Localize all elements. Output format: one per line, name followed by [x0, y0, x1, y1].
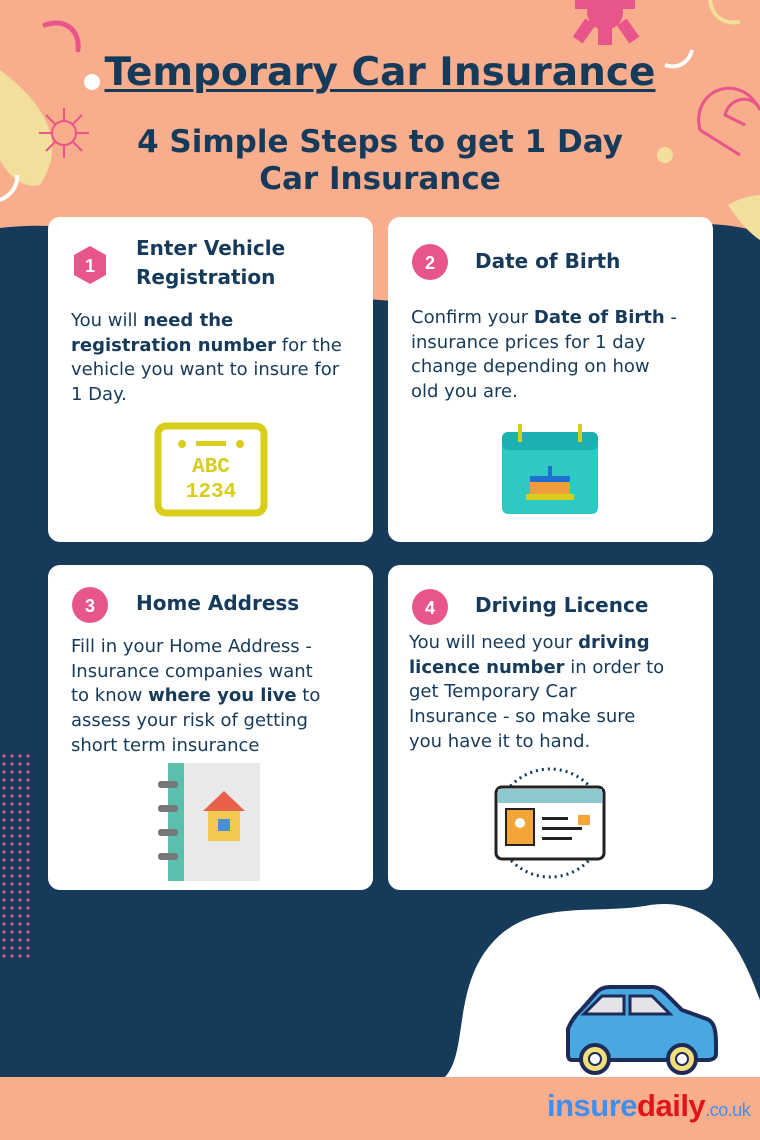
- panel: step 4: [388, 565, 713, 890]
- icon: plate: 1234: [186, 481, 236, 504]
- icon: plate: ABC: [192, 456, 230, 479]
- heading: Home Address: [136, 591, 299, 615]
- icon: licence card: [494, 768, 606, 878]
- icon: car: [566, 985, 718, 1075]
- dotted pattern: [2, 754, 30, 958]
- text: old you are.: [411, 381, 518, 402]
- logo: insuredaily.co.uk: [547, 1088, 750, 1123]
- text: You will need the: [71, 310, 233, 331]
- text: [409, 632, 664, 752]
- text: You will need your driving: [409, 632, 650, 653]
- heading: Driving Licence: [475, 593, 648, 617]
- icon: address book: [158, 763, 260, 881]
- text: licence number in order to: [409, 657, 664, 678]
- icon: calendar cake: [502, 424, 598, 514]
- subtitle: [137, 124, 623, 197]
- title: Temporary Car Insurance: [105, 50, 655, 95]
- panel: step 1: [48, 217, 373, 542]
- text: 1 Day.: [71, 384, 127, 405]
- badge 1: 1: [85, 256, 95, 276]
- text: change depending on how: [411, 356, 650, 377]
- text: get Temporary Car: [409, 681, 576, 702]
- panel: step 2: [388, 217, 713, 542]
- text: Insurance companies want: [71, 661, 313, 682]
- text: Insurance - so make sure: [409, 706, 635, 727]
- text: [411, 307, 677, 402]
- text: vehicle you want to insure for: [71, 359, 339, 380]
- text: [71, 636, 320, 756]
- text: registration number for the: [71, 335, 342, 356]
- text: Fill in your Home Address -: [71, 636, 312, 657]
- heading: Enter Vehicle: [136, 236, 285, 260]
- text: [71, 310, 342, 405]
- badge 2: 2: [425, 253, 435, 273]
- text: short term insurance: [71, 735, 259, 756]
- heading: Registration: [136, 265, 275, 289]
- panel: step 3: [48, 565, 373, 890]
- text: Confirm your Date of Birth -: [411, 307, 677, 328]
- badge 3: [72, 587, 108, 623]
- badge 2: [412, 244, 448, 280]
- badge 3: 3: [85, 596, 95, 616]
- badge 1: [74, 246, 106, 284]
- subtitle: Car Insurance: [259, 161, 501, 197]
- badge 4: 4: [425, 598, 435, 618]
- icon: plate: [154, 422, 268, 516]
- text: you have it to hand.: [409, 731, 590, 752]
- text: to know where you live to: [71, 685, 320, 706]
- text: assess your risk of getting: [71, 710, 308, 731]
- footer band: [0, 1077, 760, 1140]
- subtitle: 4 Simple Steps to get 1 Day: [137, 124, 623, 160]
- heading: [136, 236, 285, 289]
- text: insurance prices for 1 day: [411, 332, 645, 353]
- badge 4: [412, 589, 448, 625]
- heading: Date of Birth: [475, 249, 620, 273]
